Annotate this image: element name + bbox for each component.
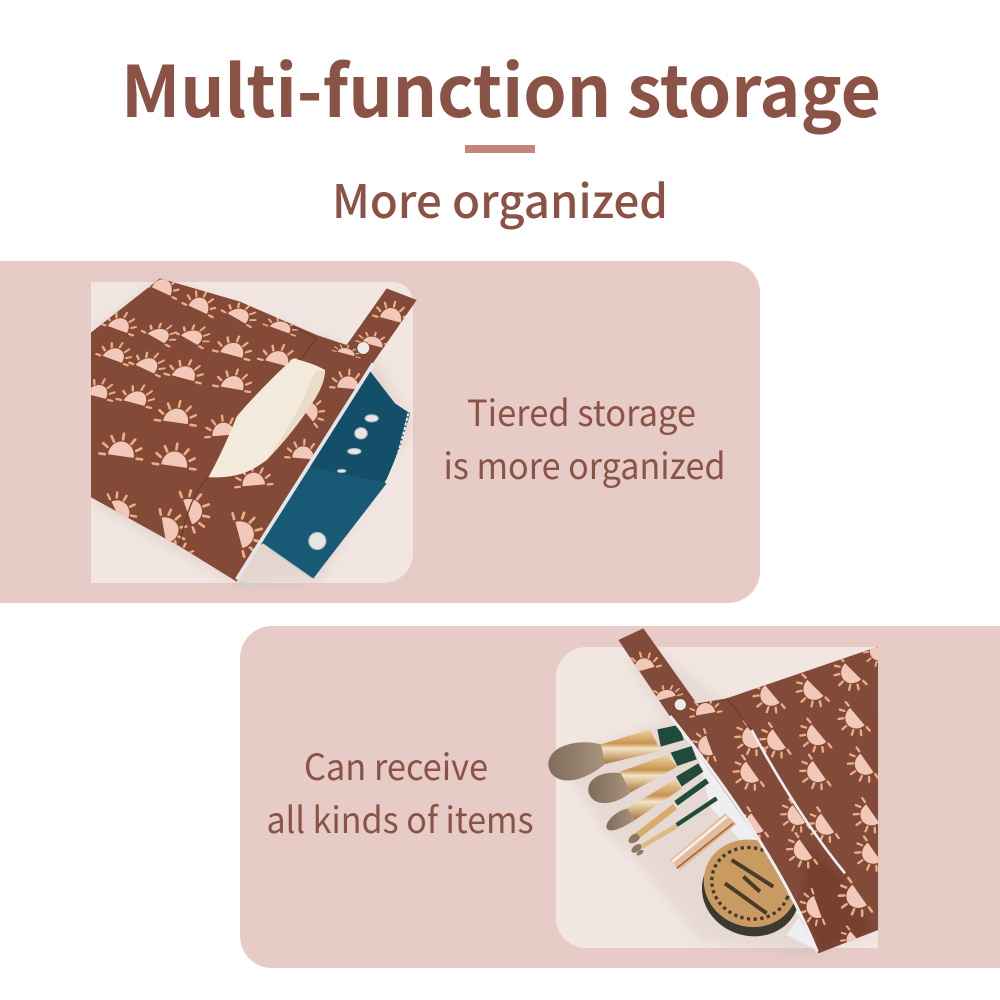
caption: tiered storage: is more organized [444,438,726,490]
makeup brushes [548,725,717,857]
subtitle: More organized [332,166,668,232]
brown bag body [618,628,878,953]
white interior lining [680,720,817,950]
shadow [94,316,412,583]
suns pattern [80,267,412,567]
zipper [237,363,373,579]
caption: all kinds of items: all kinds of items [266,792,534,844]
brush 4 [627,781,707,845]
bag photo contents [548,628,891,962]
teal diaper [257,367,410,578]
panel background [240,626,1000,968]
caption: all kinds of items: Can receive [304,739,488,791]
suns pattern [630,647,878,952]
compact case [689,826,812,950]
brush 3 [606,763,703,830]
cream liner [208,358,325,477]
caption: tiered storage: Tiered storage [467,385,696,437]
lipstick tube [670,813,737,870]
caption: all kinds of items [266,739,534,844]
brush 1 [548,725,684,780]
panel background [0,261,760,603]
brown bag body [90,278,417,582]
brush 2 [588,746,697,803]
brush 5 [630,798,717,857]
panel: tiered storage [0,261,760,603]
panel: all kinds of items [240,626,1000,968]
zippers [670,716,817,952]
bag photo contents [80,267,417,587]
photo card: bag with cosmetics [548,628,891,962]
handle snap [357,342,370,354]
handle snap [674,699,686,711]
shadow [560,643,878,957]
pocket flap edge [180,327,317,545]
title: Multi-function storage [121,36,881,138]
photo card: wet bag with diaper [80,267,417,587]
caption: tiered storage [444,385,726,490]
title divider [465,145,535,153]
